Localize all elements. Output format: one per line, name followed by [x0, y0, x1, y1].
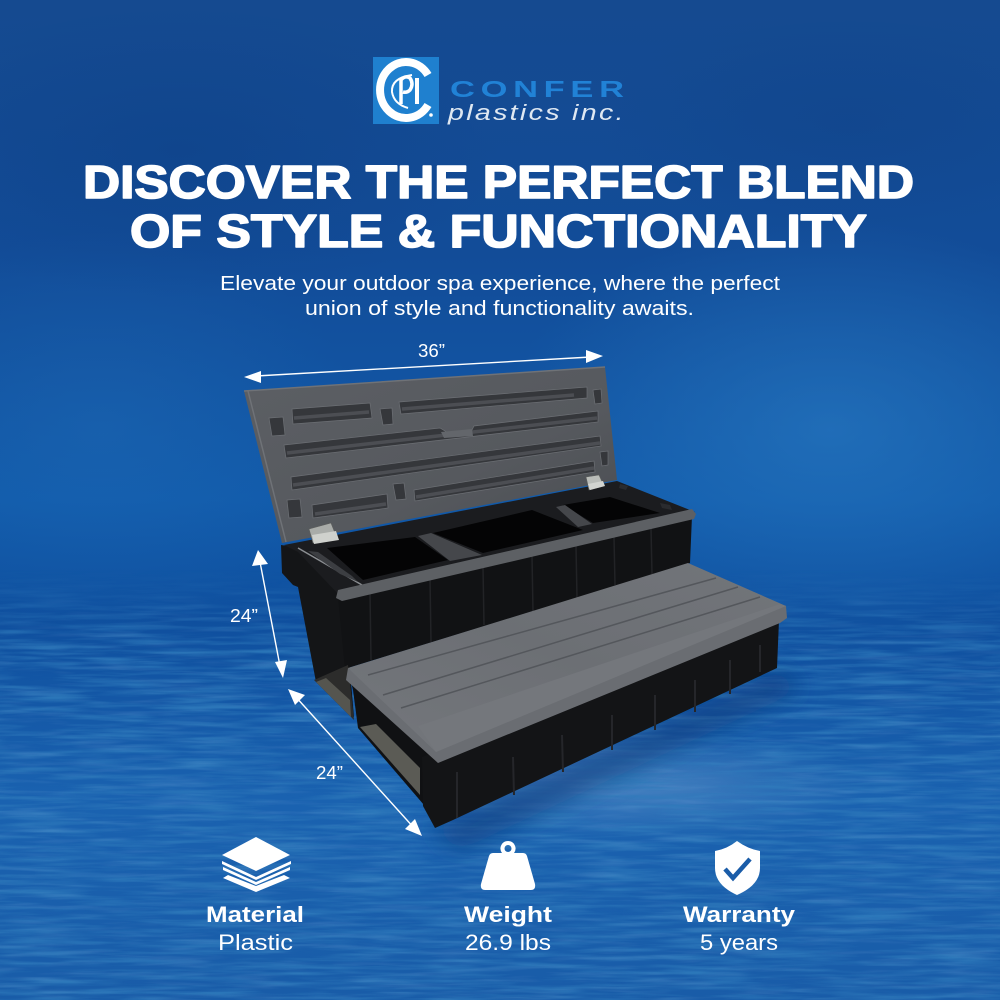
arrow: 36 inch width: [244, 350, 603, 383]
step front ribs: [457, 645, 760, 818]
title: DISCOVER THE PERFECT BLEND: [83, 156, 914, 208]
label: material: Material: [206, 902, 304, 927]
box left side: [281, 545, 354, 717]
title: OF STYLE & FUNCTIONALITY: [130, 205, 867, 257]
label: warranty: Warranty: [683, 902, 796, 927]
contact shadow: [430, 670, 800, 850]
logo wordmark: CONFER: [450, 77, 624, 102]
value: warranty: 5 years: [700, 930, 778, 955]
feature: warranty: [683, 841, 796, 955]
step tread: [348, 563, 786, 752]
icon: layers: [222, 837, 291, 892]
step lip: [346, 606, 787, 763]
divider 1: [418, 533, 482, 561]
arrow: 24 inch depth: [288, 689, 422, 836]
underside gap frame: [314, 665, 430, 805]
label: 24 inch height: 24”: [230, 606, 258, 626]
dimension arrows: [230, 341, 603, 836]
value: plastic: Plastic: [218, 930, 293, 955]
front panel: [338, 516, 692, 680]
step front: [422, 620, 779, 828]
compartment 3: [563, 497, 660, 523]
product: spa step with storage: [244, 367, 800, 850]
left silver rim: [298, 548, 362, 585]
recess inner ledges: [287, 395, 600, 514]
divider 2: [556, 505, 592, 527]
front panel ribs: [370, 528, 652, 660]
lid recesses: [269, 387, 608, 518]
lid: [244, 367, 617, 543]
subtitle: union of style and functionality awaits.: [305, 298, 694, 320]
lid center clasp: [441, 429, 473, 438]
hinge right: [586, 475, 605, 490]
right latch: [619, 484, 672, 510]
tread grooves: [368, 578, 760, 708]
subtitle: [220, 273, 781, 320]
icon: weight: [481, 841, 535, 890]
label: 36 inch: 36”: [418, 341, 445, 361]
icon: shield with check: [715, 841, 760, 895]
subtitle: Elevate your outdoor spa experience, where the perfect: [220, 273, 781, 295]
compartment 2: [433, 510, 583, 553]
tread front band: [418, 604, 786, 752]
rim: [336, 509, 696, 601]
box interior: [284, 481, 695, 596]
arrow: 24 inch height: [252, 550, 287, 678]
compartment 1: [327, 537, 448, 580]
logo: Confer Plastics Inc.: [373, 57, 624, 125]
logo tagline: plastics inc.: [447, 101, 624, 125]
feature: weight: [464, 841, 553, 955]
value: weight: 26.9 lbs: [465, 930, 551, 955]
label: 24 inch depth: 24”: [316, 763, 343, 783]
feature: material: [206, 837, 304, 955]
label: weight: Weight: [464, 902, 553, 927]
title: [83, 156, 914, 257]
hinge left: [309, 523, 339, 544]
logo mark: [373, 57, 439, 124]
